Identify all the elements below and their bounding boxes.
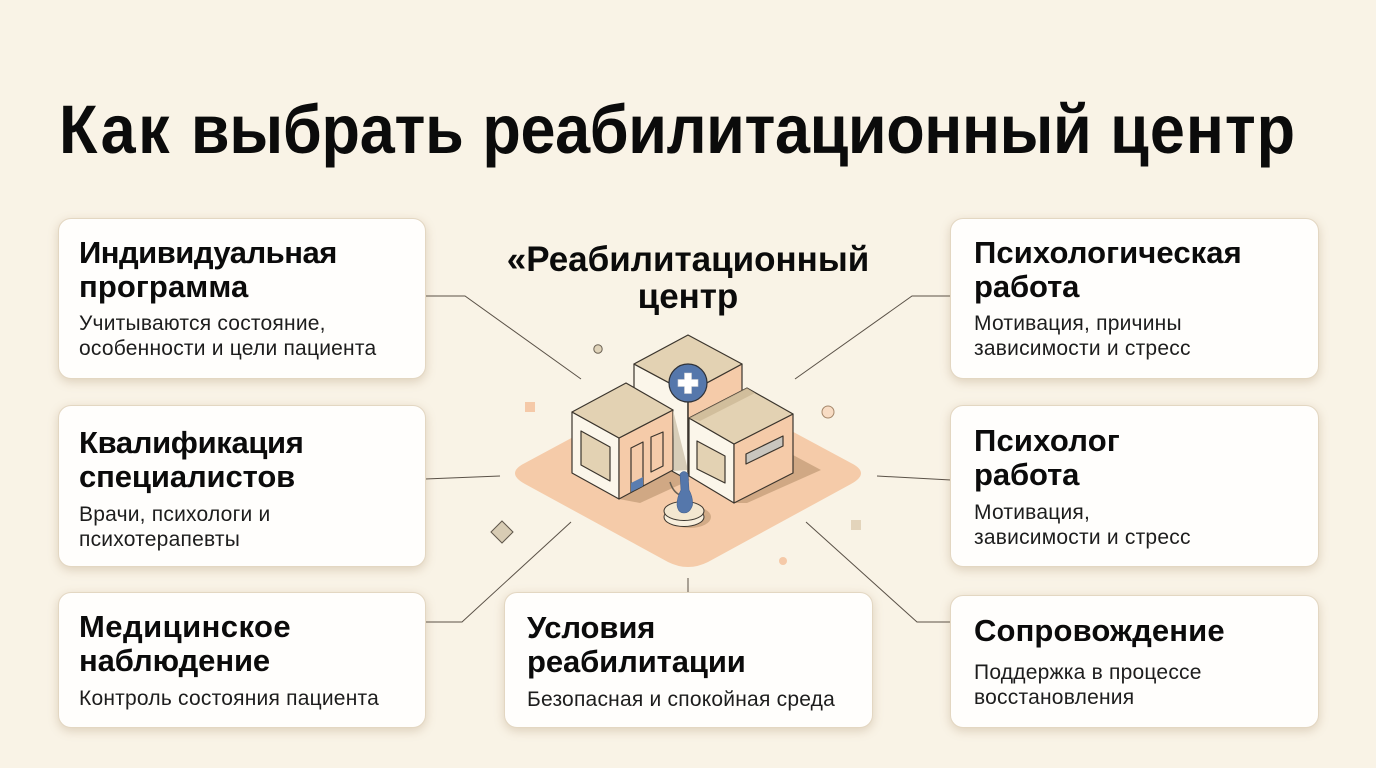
fountain base with figure <box>664 472 711 528</box>
heading: Сопровождение <box>974 613 1225 648</box>
heading <box>974 423 1120 492</box>
heading <box>79 609 291 678</box>
heading: работа <box>974 269 1079 304</box>
description: Учитываются состояние, <box>79 312 326 335</box>
centre heading: «Реабилитационный <box>507 240 869 279</box>
heading: реабилитации <box>527 644 746 679</box>
heading: Квалификация <box>79 425 304 460</box>
heading: работа <box>974 457 1079 492</box>
centre heading <box>507 240 869 316</box>
description: Контроль состояния пациента <box>79 687 379 710</box>
heading: программа <box>79 269 248 304</box>
back building <box>634 335 742 480</box>
centre heading: центр <box>638 277 738 316</box>
heading: наблюдение <box>79 643 270 678</box>
description: Поддержка в процессе <box>974 661 1202 684</box>
description: Мотивация, причины <box>974 312 1182 335</box>
heading: Индивидуальная <box>79 235 337 270</box>
left building <box>572 383 673 499</box>
panel: psychologist work <box>950 405 1319 567</box>
description <box>974 312 1191 360</box>
heading <box>527 610 746 679</box>
heading: Медицинское <box>79 609 291 644</box>
right building <box>689 388 793 503</box>
heading: специалистов <box>79 459 295 494</box>
title: Как выбрать реабилитационный центр <box>59 91 1296 168</box>
description: восстановления <box>974 686 1134 709</box>
description <box>79 312 376 360</box>
heading: Психолог <box>974 423 1120 458</box>
heading: Условия <box>527 610 655 645</box>
panel: rehabilitation conditions <box>504 592 873 728</box>
panel: aftercare support <box>950 595 1319 728</box>
panel: specialist qualification <box>58 405 426 567</box>
panel: individual programme <box>58 218 426 379</box>
description <box>974 501 1191 549</box>
description: зависимости и стресс <box>974 337 1191 360</box>
description <box>974 661 1202 709</box>
connector lines <box>425 296 951 622</box>
description: Врачи, психологи и <box>79 503 270 526</box>
heading <box>79 235 337 304</box>
ground shadows <box>619 470 690 503</box>
description <box>79 503 270 551</box>
description: психотерапевты <box>79 528 240 551</box>
panel: medical observation <box>58 592 426 728</box>
heading <box>79 425 304 494</box>
description: Безопасная и спокойная среда <box>527 688 835 711</box>
decorative shapes <box>491 345 861 565</box>
heading <box>974 235 1242 304</box>
description: Мотивация, <box>974 501 1090 524</box>
sign with medical cross <box>669 364 707 472</box>
platform <box>515 380 861 567</box>
heading: Психологическая <box>974 235 1242 270</box>
light shaft behind sign <box>673 410 688 471</box>
description: особенности и цели пациента <box>79 337 376 360</box>
roof shadow on right building <box>689 388 755 421</box>
description: зависимости и стресс <box>974 526 1191 549</box>
panel: psychological work <box>950 218 1319 379</box>
